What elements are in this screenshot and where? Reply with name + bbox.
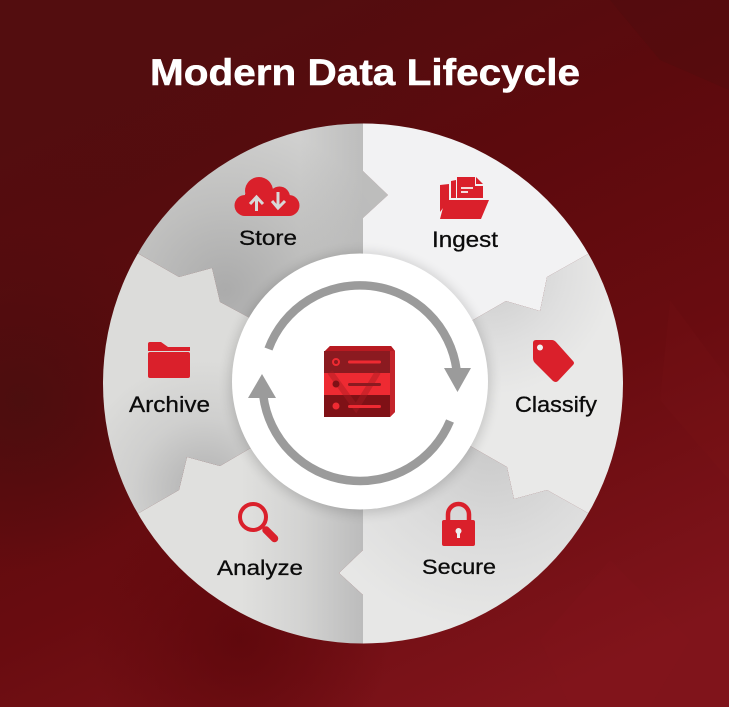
lower arc arrow [248,374,450,481]
panel: archive segment [103,254,250,514]
panel: secure segment [339,446,588,644]
icon: ingest folder [440,177,489,219]
panel: ingest segment [363,124,589,320]
icon: server [324,346,395,417]
icon: cloud [234,177,300,216]
label: ingest: Ingest [432,227,498,252]
icon: lock [442,504,475,546]
icon: tag [533,340,574,382]
label: store: Store [239,227,297,250]
cycle arrows [248,285,471,481]
label: analyze: Analyze [217,557,303,580]
lifecycle wheel [103,124,623,644]
icon: archive folder [148,342,190,378]
center circle [232,254,488,510]
label: classify: Classify [515,392,597,417]
panel: analyze segment [138,448,363,644]
panel: store segment [138,124,388,318]
icon: magnifier [240,504,274,538]
upper arc arrow [268,285,471,392]
label: archive: Archive [129,392,210,417]
panel: classify segment [470,254,623,514]
label: secure: Secure [422,556,496,579]
title: Modern Data Lifecycle [150,52,580,93]
